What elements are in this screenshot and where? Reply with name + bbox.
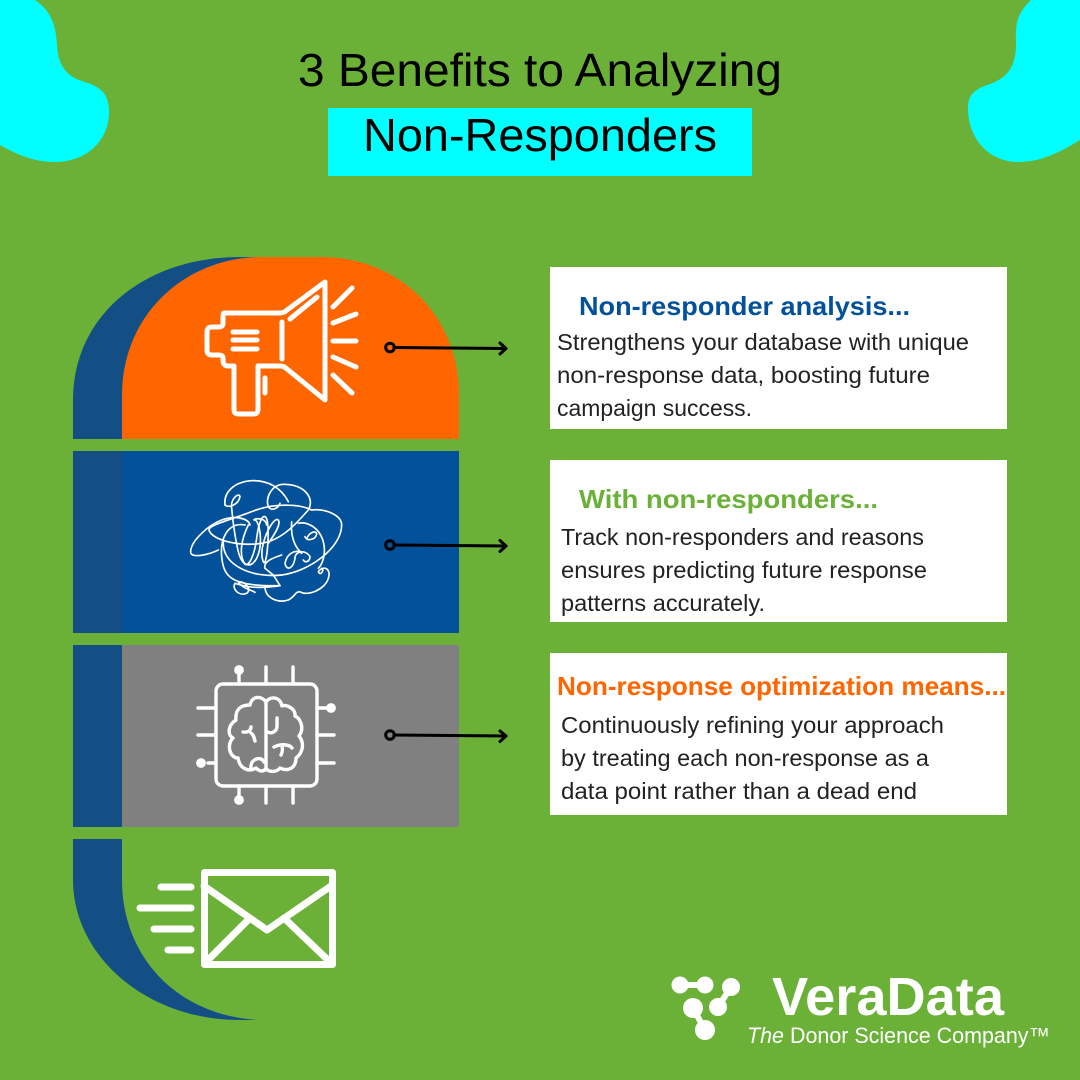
icon: scribble tangle [191,481,342,601]
heading: with non-responders: With non-responders... [579,484,878,514]
body text: panel 3: Continuously refining your approach [561,712,944,738]
arrow: panel 1 [386,343,506,354]
icon: brain chip [198,667,334,803]
panel: with non-responders [550,460,1007,622]
body text: panel 2 [561,524,927,616]
body text: panel 3: by treating each non-response as a [561,745,929,771]
icon: speeding envelope [140,872,332,964]
body text: panel 1 [557,329,969,421]
title: 3 Benefits to Analyzing [298,44,782,96]
body text: panel 2: Track non-responders and reasons [561,524,924,550]
panel: non-responder analysis [550,267,1007,429]
body text: panel 2: ensures predicting future response [561,557,927,583]
title highlight: Non-Responders [328,108,752,176]
panel: blue tangle segment [73,451,459,633]
logo mark [672,976,740,1040]
decorative blob: top right [968,0,1080,162]
icon: megaphone [207,282,356,414]
arrow: panel 3 [386,731,506,742]
heading: non-response optimization: Non-response optimization means... [557,671,1006,701]
body text: panel 3 [561,712,944,804]
heading: non-responder analysis: Non-responder analysis... [579,291,910,321]
logo: VeraData [672,967,1050,1048]
panel: orange megaphone segment [122,257,459,439]
panel: gray brain chip segment [73,645,459,827]
body text: panel 3: data point rather than a dead end [561,778,917,804]
bottom curved segment [73,839,258,1020]
body text: panel 1: Strengthens your database with unique [557,329,969,355]
title [298,44,782,176]
body text: panel 1: campaign success. [557,395,752,421]
body text: panel 2: patterns accurately. [561,590,765,616]
body text: panel 1: non-response data, boosting future [557,362,930,388]
title highlight: Non-Responders: Non-Responders [363,109,717,161]
panel: non-response optimization [550,653,1007,815]
logo tagline: The Donor Science Company™ [747,1023,1050,1048]
left column back shape: top [73,257,290,439]
decorative blob: top left [0,0,109,162]
logo wordmark: VeraData [772,967,1005,1027]
arrow: panel 2 [386,540,506,552]
